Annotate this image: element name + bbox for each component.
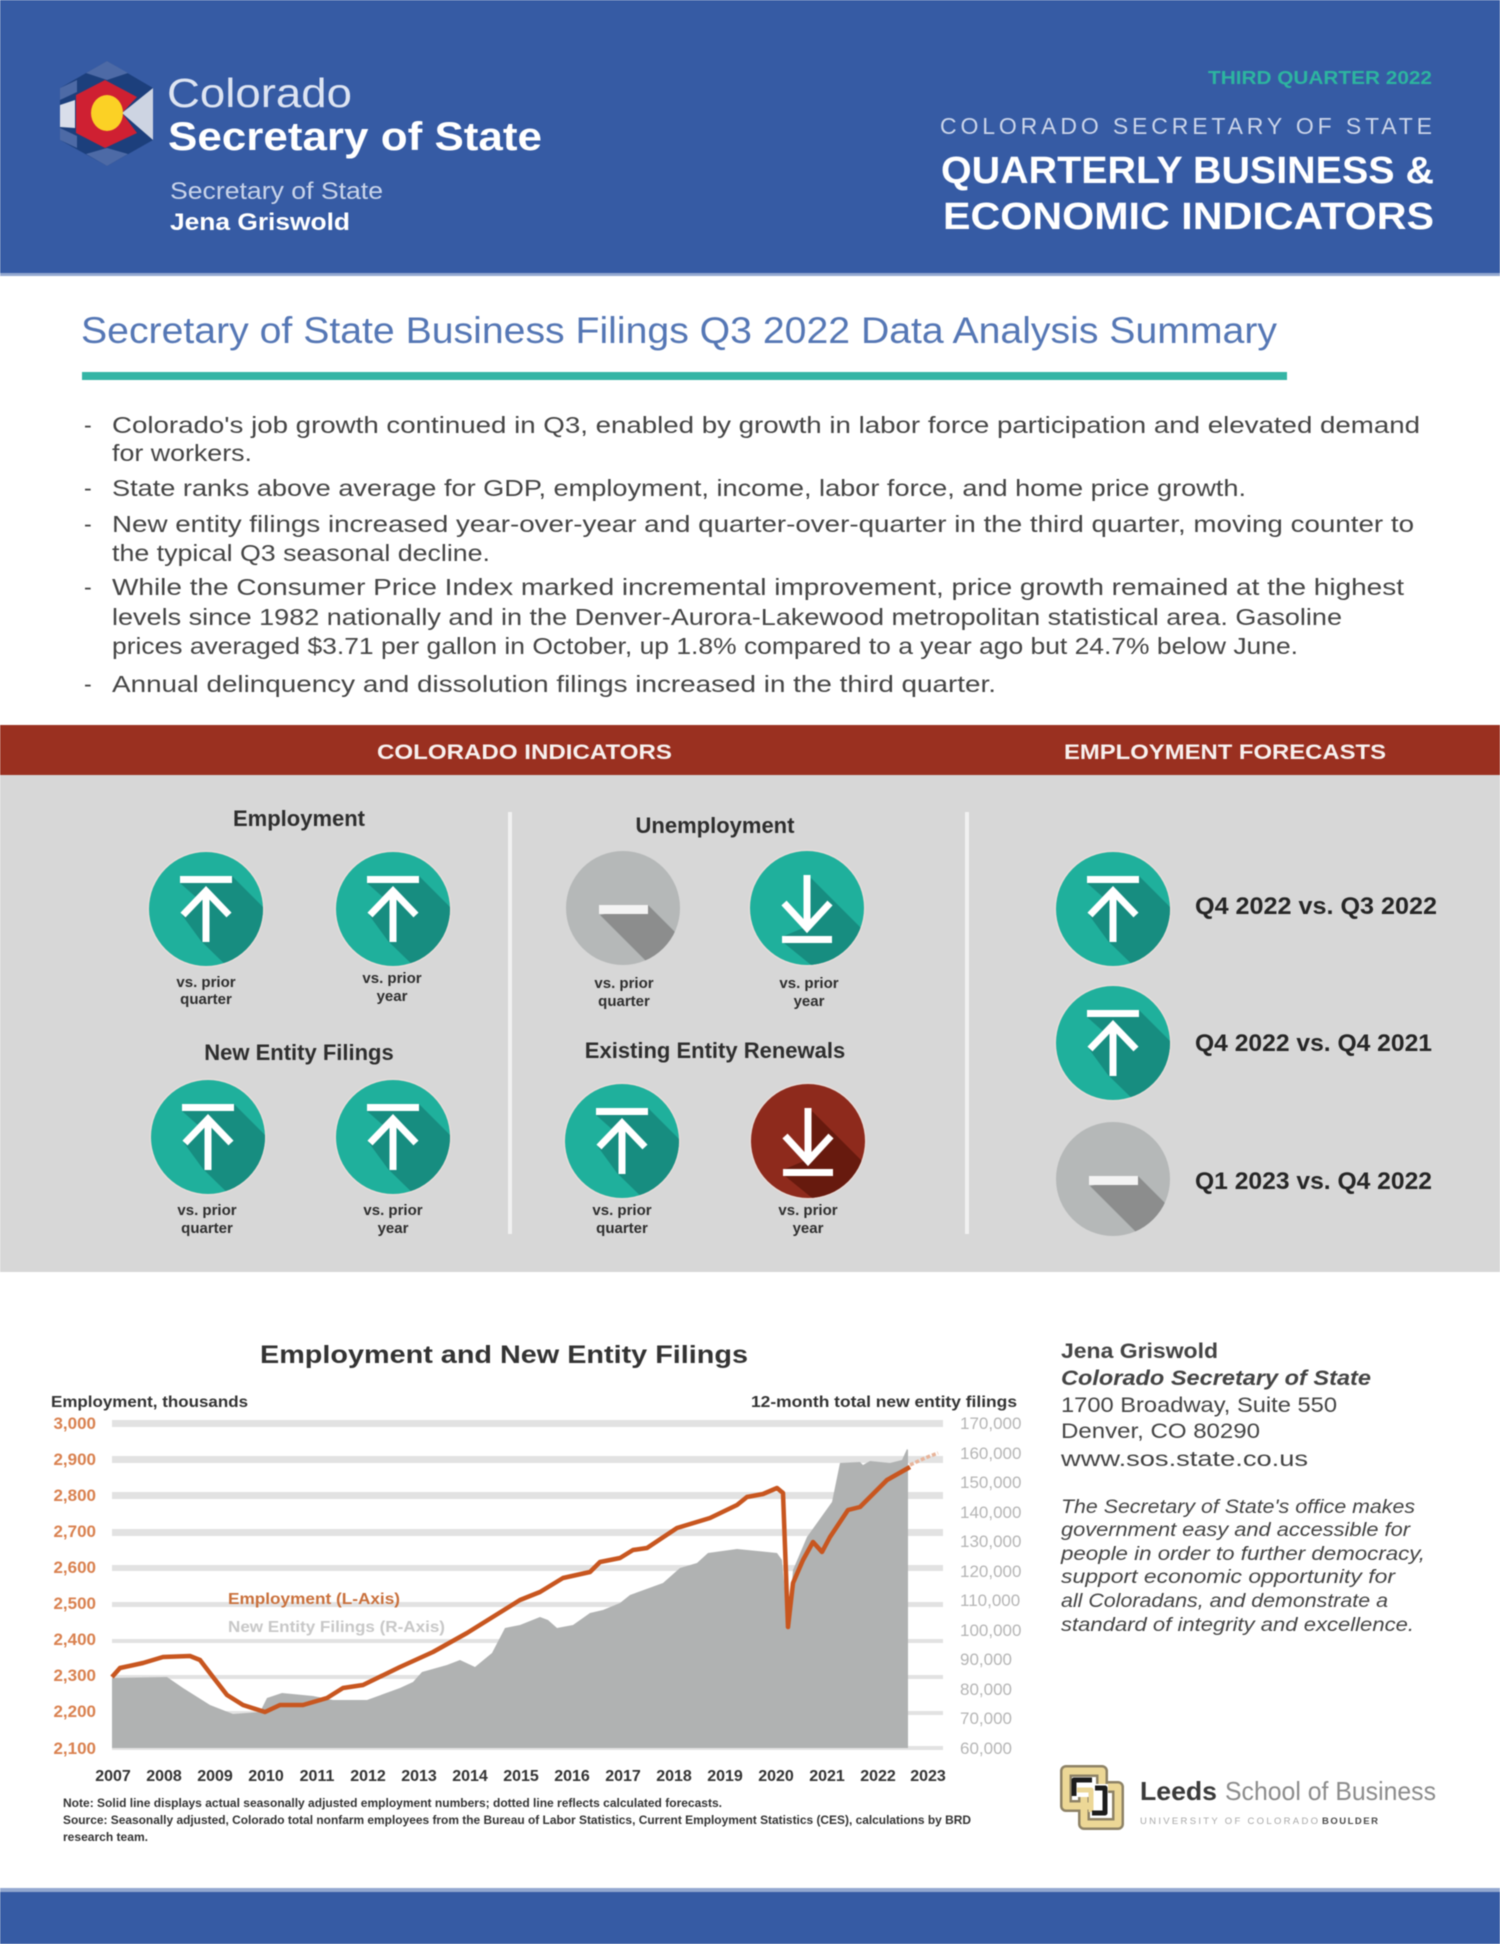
- right axis labels: 100,000: [960, 1621, 1021, 1640]
- mission statement: government easy and accessible for: [1061, 1520, 1411, 1541]
- indicator: existing entity renewals: vs. prior: [592, 1202, 652, 1219]
- forecast: Q1 vs Q4: [1056, 1122, 1432, 1289]
- chart notes: research team.: [63, 1832, 148, 1844]
- line: employment actual: [112, 1467, 910, 1712]
- left axis labels: 2,400: [53, 1630, 96, 1649]
- report title block: COLORADO SECRETARY OF STATE: [940, 113, 1432, 139]
- year axis labels: 2017: [605, 1768, 641, 1785]
- contact block: 1700 Broadway, Suite 550: [1061, 1394, 1337, 1417]
- indicator: existing entity renewals: Existing Entity Renewals: [585, 1038, 845, 1063]
- right axis labels: 120,000: [960, 1562, 1021, 1581]
- right axis labels: 60,000: [960, 1739, 1012, 1758]
- report title block: [940, 68, 1434, 238]
- icon: CU interlocking mark: [1066, 1771, 1118, 1824]
- indicator: new entity filings: [150, 1040, 498, 1242]
- gridlines: [112, 1420, 943, 1750]
- contact block: Denver, CO 80290: [1061, 1420, 1260, 1443]
- indicator: employment: vs. prior: [176, 974, 236, 991]
- year axis labels: 2018: [656, 1768, 692, 1785]
- year axis labels: 2011: [300, 1768, 334, 1785]
- indicator: new entity filings: quarter: [181, 1220, 233, 1237]
- mission statement: [1060, 1497, 1425, 1636]
- bullet: job growth: [84, 412, 1420, 466]
- bullet: delinquency: -: [84, 671, 92, 697]
- left axis labels: 3,000: [53, 1414, 96, 1433]
- secretary name: Jena Griswold: [170, 209, 350, 236]
- header banner: [0, 0, 1500, 276]
- year axis labels: 2008: [146, 1768, 182, 1785]
- indicator: new entity filings: New Entity Filings: [204, 1040, 394, 1065]
- bullet: consumer price index: While the Consumer Price Index marked incremental improvement, price growth remained at the highest: [112, 574, 1405, 600]
- mission statement: all Coloradans, and demonstrate a: [1061, 1591, 1388, 1612]
- bullet: consumer price index: prices averaged $3.71 per gallon in October, up 1.8% compared to a year ago but 24.7% below June.: [112, 633, 1298, 659]
- chart notes: Note: Solid line displays actual seasonally adjusted employment numbers; dotted line reflects calculated forecasts.: [63, 1798, 722, 1810]
- right axis labels: 80,000: [960, 1680, 1012, 1699]
- section header band: [0, 725, 1500, 775]
- indicator: existing entity renewals: quarter: [596, 1220, 648, 1237]
- right axis labels: 150,000: [960, 1473, 1021, 1492]
- bullet: delinquency: Annual delinquency and dissolution filings increased in the third quarter.: [112, 671, 996, 697]
- mission statement: The Secretary of State's office makes: [1061, 1497, 1416, 1518]
- year axis labels: 2007: [95, 1768, 131, 1785]
- bullet: new entity filings: the typical Q3 seasonal decline.: [112, 540, 490, 566]
- report title block: THIRD QUARTER 2022: [1208, 68, 1432, 88]
- logo: Leeds School of Business: [1066, 1771, 1436, 1827]
- indicator: unemployment: year: [794, 993, 825, 1010]
- year axis labels: 2009: [197, 1768, 233, 1785]
- indicator: new entity filings: year: [378, 1220, 409, 1237]
- bullet: state ranks: State ranks above average for GDP, employment, income, labor force, and home price growth.: [112, 475, 1246, 501]
- year axis labels: 2019: [707, 1768, 743, 1785]
- indicator: employment: Employment: [233, 806, 366, 831]
- left axis title: Employment, thousands: [51, 1394, 248, 1411]
- indicator: unemployment: vs. prior: [594, 975, 654, 992]
- left axis labels: 2,200: [53, 1702, 96, 1721]
- area: new entity filings: [112, 1449, 908, 1748]
- section header band: EMPLOYMENT FORECASTS: [1064, 741, 1386, 764]
- logo wordmark: [167, 70, 542, 159]
- indicator: employment: year: [377, 988, 408, 1005]
- chart notes: Source: Seasonally adjusted, Colorado total nonfarm employees from the Bureau of Labor Statistics, Current Employment Statistics (CES), calculations by BRD: [63, 1815, 971, 1827]
- left axis labels: 2,300: [53, 1666, 96, 1685]
- left axis labels: 2,500: [53, 1594, 96, 1613]
- right axis labels: 140,000: [960, 1503, 1021, 1522]
- indicator: employment: quarter: [180, 991, 232, 1008]
- bullet: new entity filings: New entity filings increased year-over-year and quarter-over-quarter in the third quarter, moving counter to: [112, 511, 1414, 537]
- year axis labels: 2012: [350, 1768, 386, 1785]
- indicator: employment: vs. prior: [362, 970, 422, 987]
- contact block: Jena Griswold: [1061, 1340, 1218, 1363]
- bullet: consumer price index: levels since 1982 nationally and in the Denver-Aurora-Lakewood metropolitan statistical area. Gasoline: [112, 604, 1342, 630]
- chart: employment and new entity filings: [51, 1341, 1021, 1844]
- bullet: new entity filings: -: [84, 511, 92, 537]
- year axis labels: 2023: [910, 1768, 946, 1785]
- bullet: job growth: -: [84, 412, 92, 438]
- right axis labels: 130,000: [960, 1532, 1021, 1551]
- indicator: unemployment: [566, 813, 907, 1018]
- bullet: consumer price index: -: [84, 574, 92, 600]
- year axis labels: 2016: [554, 1768, 590, 1785]
- mission statement: people in order to further democracy,: [1060, 1544, 1425, 1565]
- forecast: Q4 vs prior Q4: [1054, 984, 1432, 1148]
- year axis labels: 2015: [503, 1768, 539, 1785]
- left axis labels: 2,700: [53, 1522, 96, 1541]
- bullet: job growth: Colorado's job growth continued in Q3, enabled by growth in labor force participation and elevated demand: [112, 412, 1420, 438]
- left axis labels: 2,600: [53, 1558, 96, 1577]
- contact block: Colorado Secretary of State: [1061, 1367, 1371, 1390]
- forecast: Q1 vs Q4: Q1 2023 vs. Q4 2022: [1195, 1168, 1432, 1195]
- year axis labels: 2021: [809, 1768, 845, 1785]
- right axis labels: 160,000: [960, 1444, 1021, 1463]
- right axis labels: 90,000: [960, 1650, 1012, 1669]
- indicator: existing entity renewals: year: [793, 1220, 824, 1237]
- bullet: state ranks: -: [84, 475, 92, 501]
- year axis labels: 2010: [248, 1768, 284, 1785]
- line: employment forecast: [910, 1453, 938, 1465]
- mission statement: support economic opportunity for: [1061, 1567, 1396, 1588]
- logo: Leeds School of Business: UNIVERSITY OF COLORADO: [1140, 1816, 1318, 1827]
- bullet: new entity filings: [84, 511, 1414, 566]
- chart notes: [63, 1798, 971, 1844]
- bullet: consumer price index: [84, 574, 1405, 659]
- logo wordmark: Secretary of State: [168, 115, 542, 159]
- secretary name: Secretary of State: [170, 178, 383, 205]
- forecast: Q4 vs prior Q4: Q4 2022 vs. Q4 2021: [1195, 1030, 1432, 1057]
- logo wordmark: Colorado: [167, 70, 352, 116]
- secretary name: [170, 178, 383, 236]
- indicator: employment: [148, 806, 498, 1014]
- legend: Employment (L-Axis): [228, 1591, 400, 1608]
- mission statement: standard of integrity and excellence.: [1061, 1615, 1414, 1636]
- left axis labels: [53, 1414, 96, 1758]
- year axis labels: 2014: [452, 1768, 488, 1785]
- year axis labels: 2022: [860, 1768, 896, 1785]
- forecast: Q4 vs Q3: Q4 2022 vs. Q3 2022: [1195, 893, 1437, 920]
- left axis labels: 2,800: [53, 1486, 96, 1505]
- report title block: ECONOMIC INDICATORS: [943, 196, 1434, 238]
- legend: New Entity Filings (R-Axis): [228, 1619, 445, 1636]
- logo: Leeds School of Business: BOULDER: [1322, 1816, 1378, 1827]
- report title block: QUARTERLY BUSINESS &: [941, 150, 1434, 192]
- section header band: COLORADO INDICATORS: [377, 741, 672, 764]
- bullet: job growth: for workers.: [112, 440, 252, 466]
- right axis labels: 170,000: [960, 1414, 1021, 1433]
- indicator: existing entity renewals: vs. prior: [778, 1202, 838, 1219]
- year axis labels: 2020: [758, 1768, 794, 1785]
- logo: Leeds School of Business: Leeds: [1140, 1776, 1217, 1806]
- logo: Leeds School of Business: School of Business: [1225, 1776, 1436, 1806]
- summary bullet list: [84, 412, 1420, 697]
- left axis labels: 2,100: [53, 1739, 96, 1758]
- summary heading: Secretary of State Business Filings Q3 2022 Data Analysis Summary: [81, 310, 1278, 351]
- forecast: Q4 vs Q3: [1054, 850, 1437, 1014]
- footer band: [0, 1888, 1500, 1944]
- panel: indicators: [0, 775, 1500, 1289]
- indicator: new entity filings: vs. prior: [363, 1202, 423, 1219]
- right axis labels: 70,000: [960, 1709, 1012, 1728]
- left axis labels: 2,900: [53, 1450, 96, 1469]
- legend: [228, 1591, 445, 1636]
- indicator: unemployment: vs. prior: [779, 975, 839, 992]
- indicator: unemployment: Unemployment: [636, 813, 795, 838]
- right axis labels: [960, 1414, 1021, 1758]
- contact block: www.sos.state.co.us: [1060, 1448, 1308, 1471]
- indicator: unemployment: quarter: [598, 993, 650, 1010]
- right axis labels: 110,000: [960, 1591, 1020, 1610]
- icon: Colorado state logo: [60, 61, 153, 166]
- indicator: new entity filings: vs. prior: [177, 1202, 237, 1219]
- year axis labels: 2013: [401, 1768, 437, 1785]
- summary heading: [81, 310, 1287, 380]
- indicator: existing entity renewals: [564, 1038, 908, 1246]
- right axis title: 12-month total new entity filings: [751, 1394, 1017, 1411]
- contact block: [1060, 1340, 1371, 1471]
- chart title: Employment and New Entity Filings: [260, 1341, 748, 1369]
- year axis labels: [95, 1768, 946, 1785]
